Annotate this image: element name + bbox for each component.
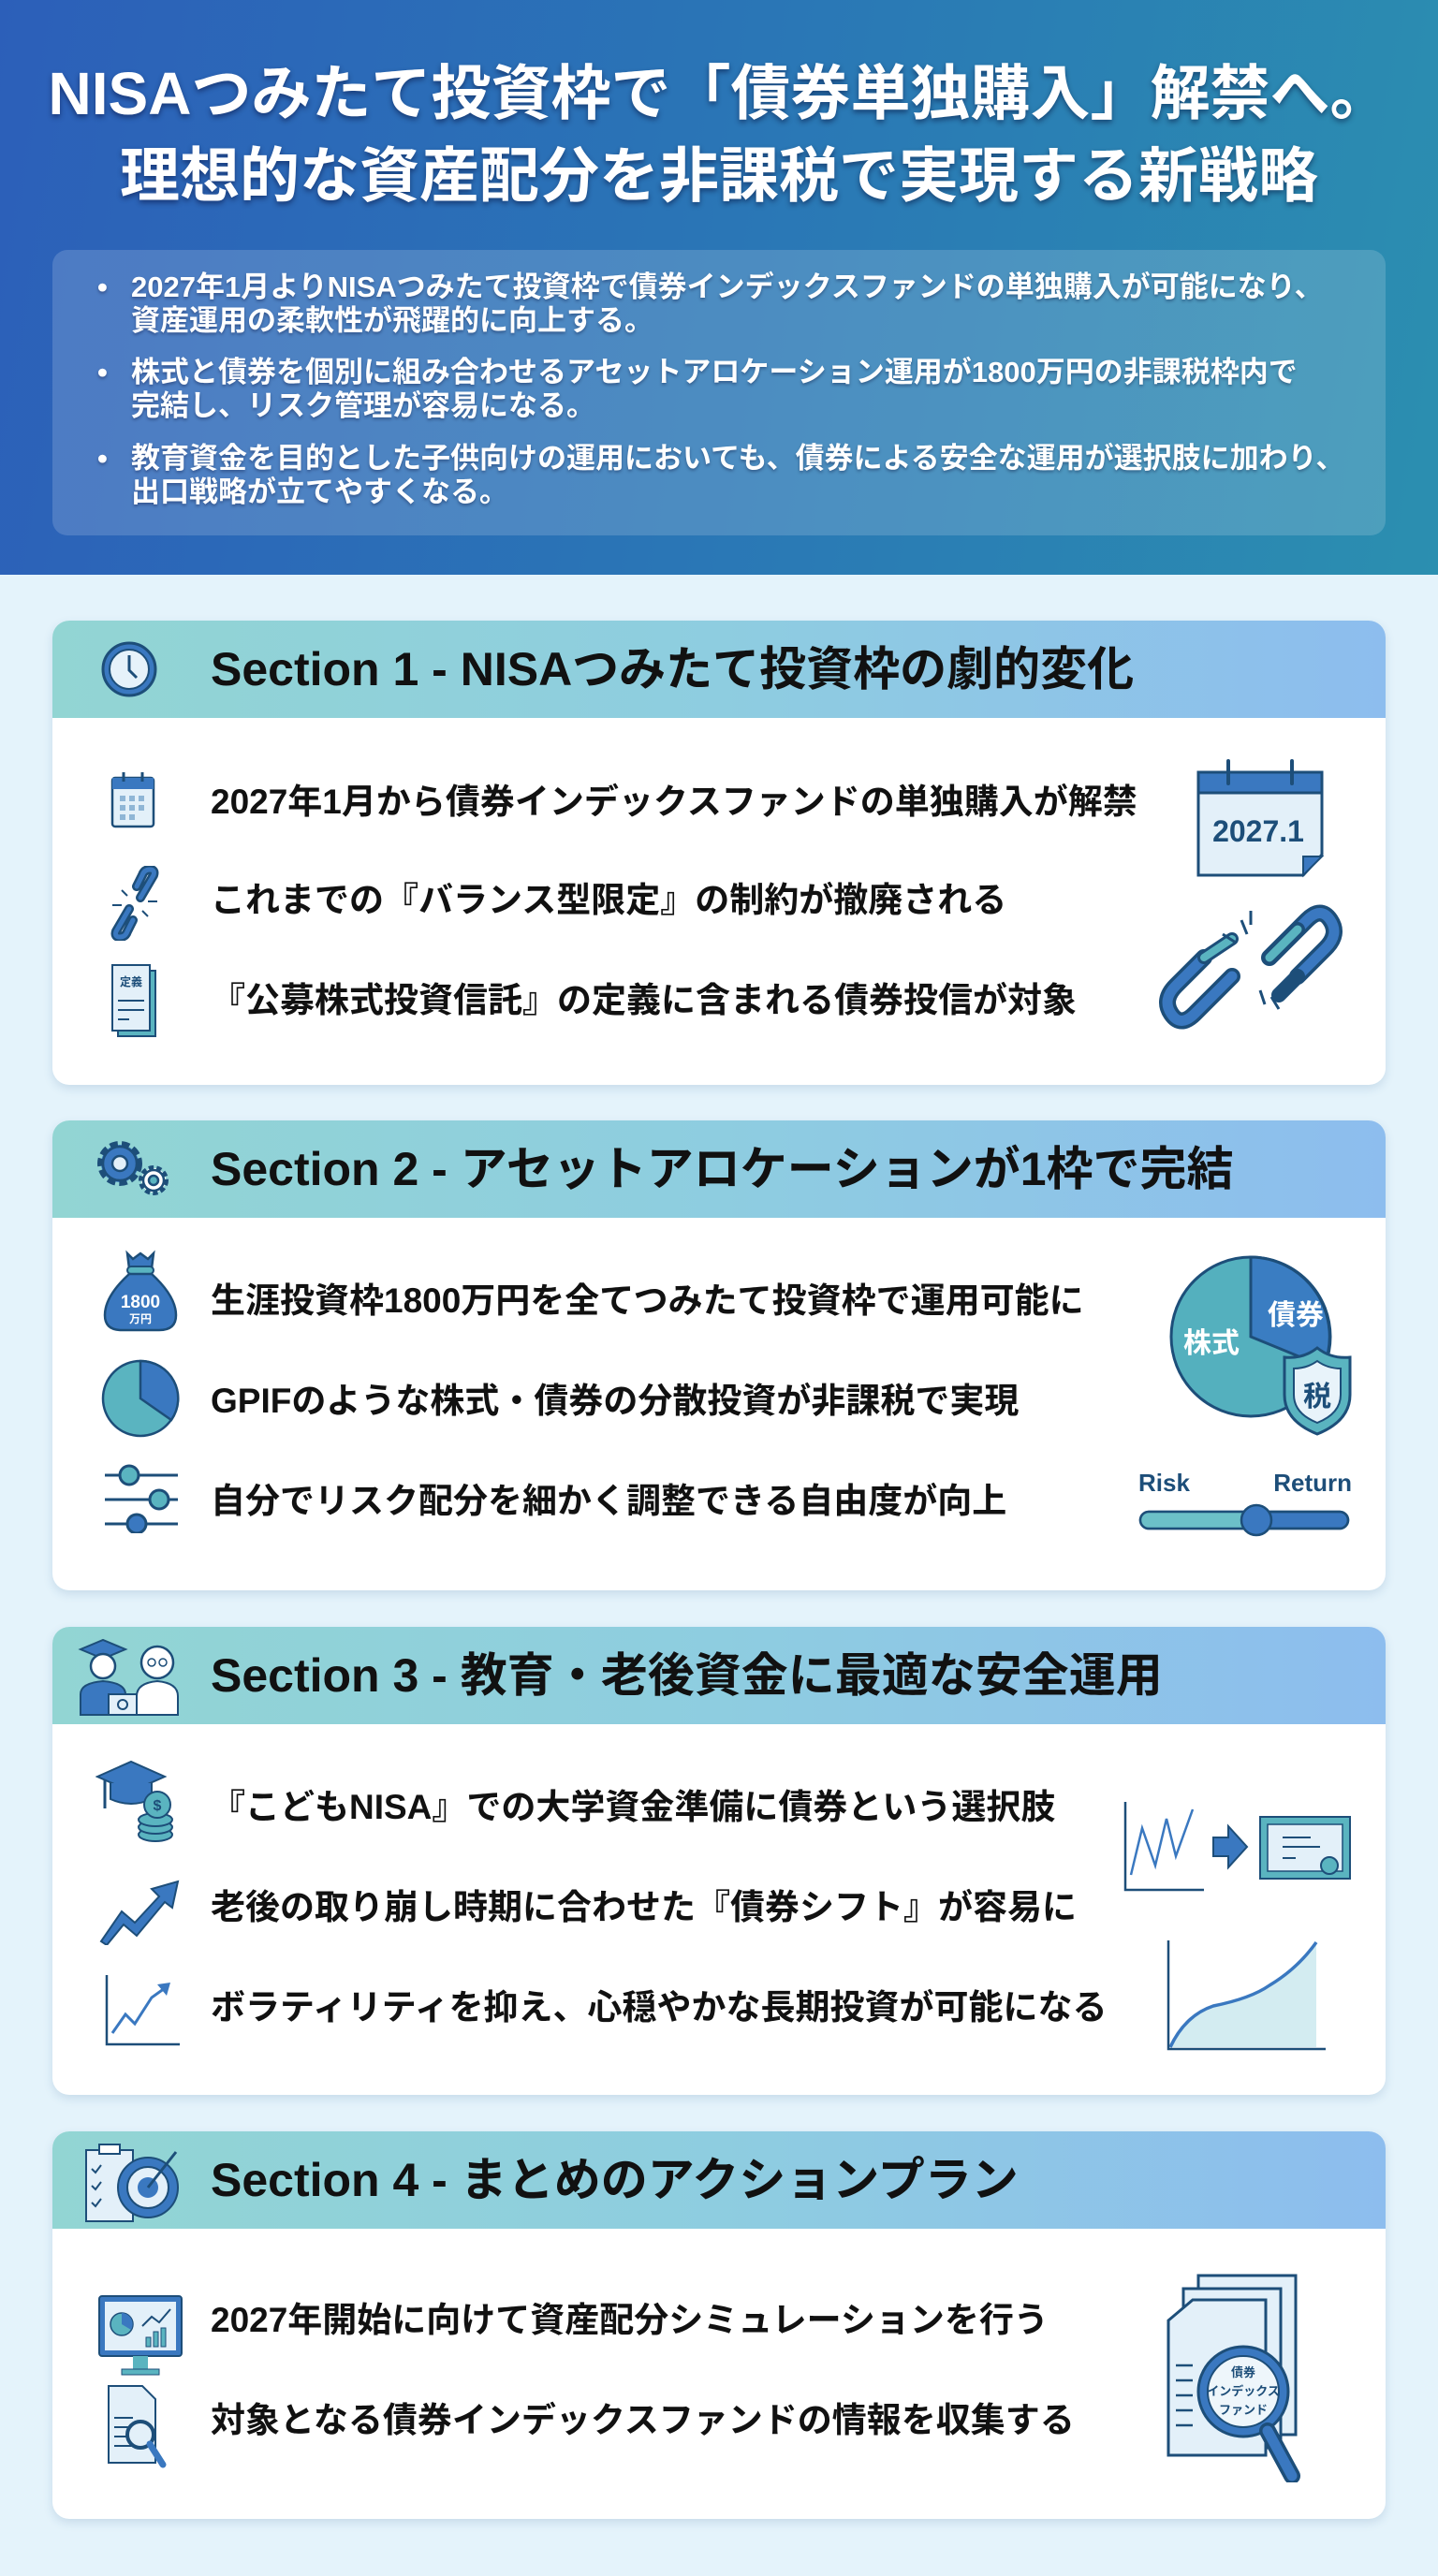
- section 2 heading: Section 2 - アセットアロケーションが1枠で完結: [211, 1143, 1234, 1195]
- icon: broken chain small: [110, 866, 159, 941]
- section 3 heading: Section 3 - 教育・老後資金に最適な安全運用: [211, 1649, 1163, 1702]
- icon: definition document: [111, 964, 156, 1037]
- icon: definition document: 定義: [120, 974, 142, 988]
- illustration: pie with tax shield: 債券: [1268, 1300, 1324, 1331]
- illustration: documents with magnifier: 債券: [1231, 2365, 1255, 2379]
- title: NISAつみたて投資枠で「債券単独購入」解禁へ。: [49, 60, 1389, 127]
- header: [0, 0, 1438, 575]
- illustration: documents with magnifier: [1167, 2275, 1300, 2482]
- row 1: 生涯投資枠1800万円を全てつみたて投資枠で運用可能に: [211, 1281, 1084, 1320]
- panel: section 2: [52, 1120, 1386, 1590]
- row 1: 2027年開始に向けて資産配分シミュレーションを行う: [211, 2301, 1049, 2339]
- icon: zigzag arrow up: [99, 1880, 180, 1945]
- icon: monitor with charts: [98, 2295, 183, 2376]
- illustration: smooth growth curve: [1167, 1940, 1326, 2050]
- panel: section 3: [52, 1627, 1386, 2095]
- icon: sliders: [105, 1464, 178, 1533]
- summary box: 教育資金を目的とした子供向けの運用においても、債券による安全な運用が選択肢に加わり、: [131, 442, 1344, 475]
- illustration: risk return slider: [1138, 1469, 1352, 1537]
- icon: document search: [108, 2385, 167, 2467]
- row 1: 2027年1月から債券インデックスファンドの単独購入が解禁: [211, 783, 1137, 821]
- icon: money bag: [103, 1251, 178, 1331]
- illustration: calendar 2027.1: 2027.1: [1212, 814, 1304, 848]
- illustration: pie with tax shield: 株式: [1183, 1328, 1240, 1359]
- row 2: 老後の取り崩し時期に合わせた『債券シフト』が容易に: [211, 1888, 1077, 1926]
- illustration: chart to certificate: [1123, 1802, 1351, 1891]
- icon: student and senior: [79, 1638, 179, 1716]
- summary box: [52, 250, 1386, 535]
- section 4 heading: Section 4 - まとめのアクションプラン: [211, 2154, 1019, 2206]
- icon: graduation cap with coins: [95, 1760, 173, 1842]
- panel: section 4: [52, 2131, 1386, 2519]
- row 3: 『公募株式投資信託』の定義に含まれる債券投信が対象: [211, 981, 1077, 1019]
- icon: checklist target: [85, 2144, 179, 2222]
- illustration: risk return slider: Risk: [1138, 1469, 1190, 1497]
- section 1 heading: Section 1 - NISAつみたて投資枠の劇的変化: [211, 643, 1134, 695]
- illustration: risk return slider: Return: [1273, 1469, 1352, 1497]
- row 3: ボラティリティを抑え、心穏やかな長期投資が可能になる: [211, 1988, 1108, 2027]
- row 2: これまでの『バランス型限定』の制約が撤廃される: [211, 881, 1006, 919]
- icon: money bag: 1800: [121, 1293, 160, 1312]
- illustration: pie with tax shield: 税: [1303, 1382, 1331, 1412]
- summary box: 完結し、リスク管理が容易になる。: [131, 389, 595, 422]
- row 2: GPIFのような株式・債券の分散投資が非課税で実現: [211, 1382, 1019, 1420]
- illustration: broken chain: [1159, 904, 1343, 1030]
- icon: gears: [97, 1141, 169, 1195]
- icon: money bag: 万円: [129, 1312, 152, 1325]
- icon: graduation cap with coins: $: [154, 1798, 162, 1814]
- summary box: 株式と債券を個別に組み合わせるアセットアロケーション運用が1800万円の非課税枠内で: [131, 356, 1298, 388]
- summary box: 資産運用の柔軟性が飛躍的に向上する。: [131, 304, 653, 337]
- summary box: 2027年1月よりNISAつみたて投資枠で債券インデックスファンドの単独購入が可能になり、: [131, 271, 1323, 303]
- illustration: documents with magnifier: ファンド: [1219, 2403, 1268, 2417]
- icon: pie: [101, 1359, 180, 1438]
- icon: calendar small: [110, 772, 155, 827]
- panel: section 1: [52, 621, 1386, 1085]
- illustration: calendar 2027.1: [1196, 759, 1324, 878]
- row 1: 『こどもNISA』での大学資金準備に債券という選択肢: [211, 1788, 1055, 1826]
- row 2: 対象となる債券インデックスファンドの情報を収集する: [211, 2401, 1075, 2439]
- title: [49, 60, 1389, 210]
- row 3: 自分でリスク配分を細かく調整できる自由度が向上: [211, 1482, 1006, 1520]
- icon: line chart: [105, 1975, 180, 2046]
- summary box: 出口戦略が立てやすくなる。: [131, 476, 508, 508]
- illustration: documents with magnifier: インデックス: [1207, 2384, 1280, 2398]
- title: 理想的な資産配分を非課税で実現する新戦略: [120, 142, 1318, 210]
- illustration: pie with tax shield: [1170, 1256, 1352, 1436]
- icon: clock: [101, 642, 157, 696]
